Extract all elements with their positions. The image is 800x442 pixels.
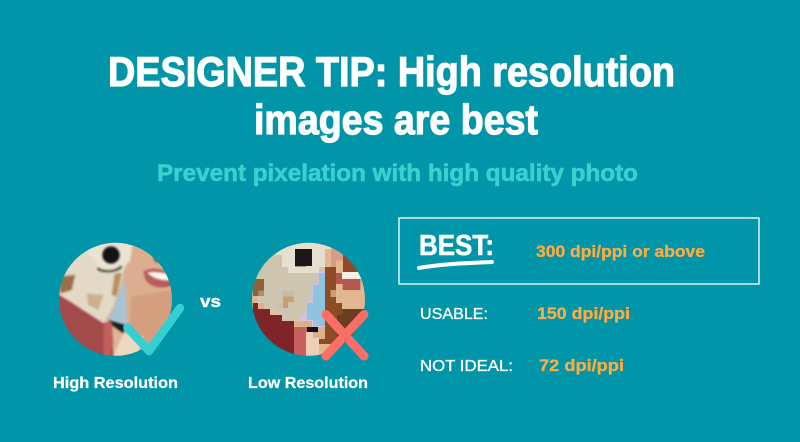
label: high resolution: High Resolution [53,375,178,392]
icon: x mark [326,314,364,356]
vs label: vs [200,292,221,311]
not ideal label: NOT IDEAL: [420,358,513,375]
box outline [399,218,759,284]
label: low resolution: Low Resolution [248,375,368,392]
infographic canvas [54,54,760,392]
subtitle: Prevent pixelation with high quality photo [157,160,638,187]
title [108,48,675,143]
best heading: BEST: [419,230,494,262]
best underline [419,262,492,268]
high resolution photo [59,242,172,356]
title: DESIGNER TIP: High resolution [108,48,675,95]
title: images are best [254,96,538,143]
usable value: 150 dpi/ppi [537,305,630,323]
not ideal value: 72 dpi/ppi [539,357,624,375]
best value: 300 dpi/ppi or above [536,243,705,261]
icon: check mark [128,308,180,351]
usable label: USABLE: [420,306,488,323]
panel: best resolution [399,218,759,284]
low resolution photo [252,242,365,356]
